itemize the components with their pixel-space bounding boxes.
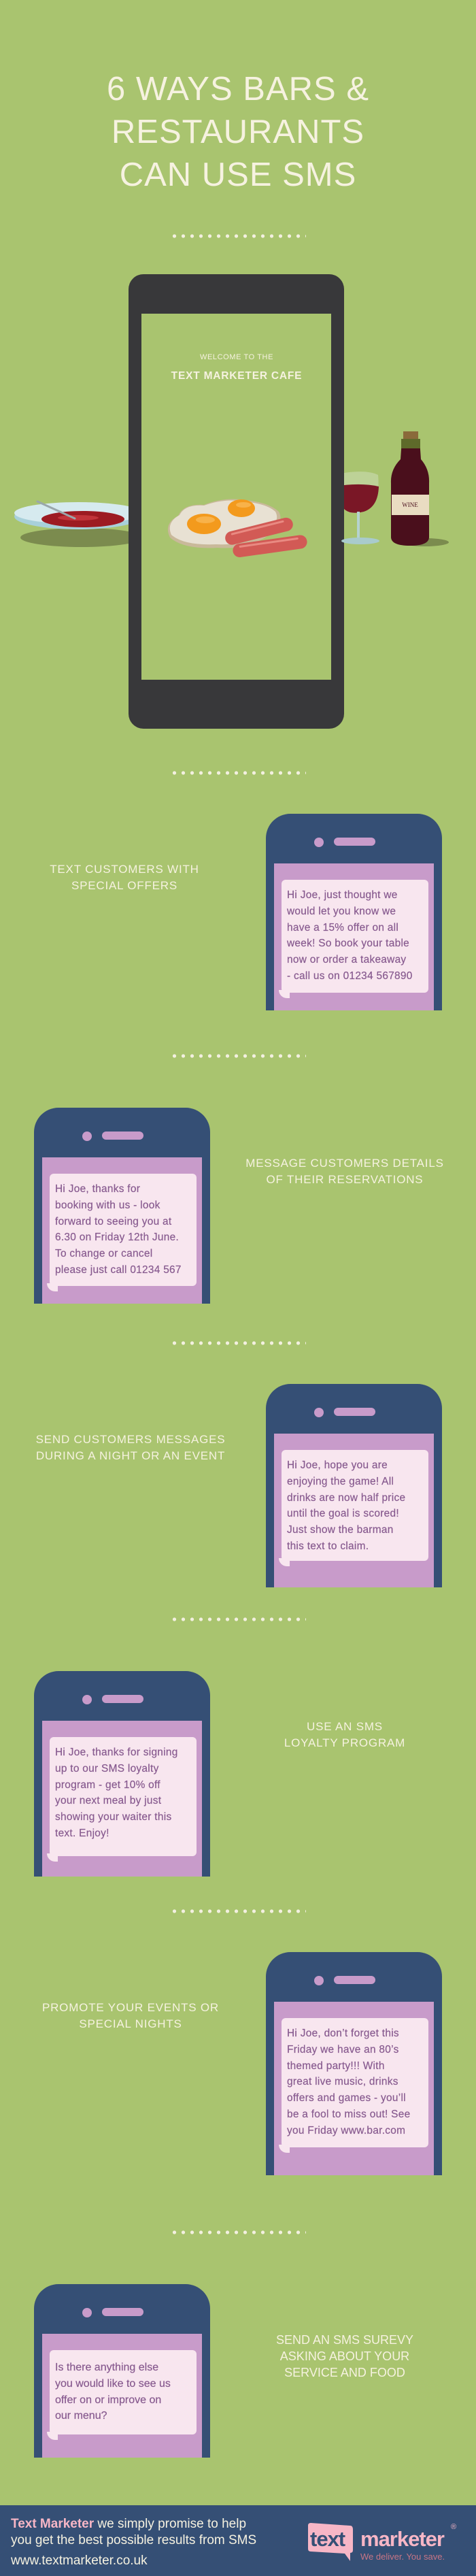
phone 1 [266, 814, 442, 1010]
footer text [11, 2517, 256, 2568]
hero: tablet with food [14, 274, 449, 729]
message bubble 5: Hi Joe, don’t forget this [287, 2028, 399, 2039]
message bubble 1: - call us on 01234 567890 [287, 970, 413, 982]
message bubble 3: this text to claim. [287, 1540, 369, 1552]
message bubble 5: offers and games - you’ll [287, 2092, 406, 2104]
wine bottle [391, 431, 449, 546]
message bubble 2: booking with us - look [55, 1200, 160, 1211]
section 6 heading [276, 2333, 413, 2379]
phone 3 [266, 1384, 442, 1587]
section 4 heading: LOYALTY PROGRAM [284, 1736, 405, 1749]
message bubble 2 [50, 1174, 197, 1286]
logo [308, 2523, 456, 2562]
phone 2 [34, 1108, 210, 1304]
message bubble 6 [50, 2350, 197, 2434]
phone 4 [34, 1671, 210, 1877]
message bubble 4: program - get 10% off [55, 1779, 160, 1791]
message bubble 1: week! So book your table [287, 938, 409, 949]
message bubble 1: now or order a takeaway [287, 954, 406, 965]
message bubble 4: up to our SMS loyalty [55, 1763, 159, 1774]
footer text: Text Marketer we simply promise to help [11, 2517, 246, 2531]
section 2 heading: OF THEIR RESERVATIONS [267, 1173, 423, 1186]
message bubble 1 [282, 880, 428, 993]
tablet: WELCOME TO THE [200, 353, 273, 361]
message bubble 2: forward to seeing you at [55, 1216, 171, 1227]
section 4 heading [284, 1720, 405, 1749]
plate of soup [14, 501, 143, 547]
message bubble 2: Hi Joe, thanks for [55, 1183, 140, 1195]
logo: ® [451, 2523, 456, 2531]
wine bottle: WINE [402, 501, 418, 508]
message bubble 4: text. Enjoy! [55, 1828, 109, 1839]
message bubble 4: Hi Joe, thanks for signing [55, 1747, 178, 1758]
message bubble 3: Just show the barman [287, 1524, 394, 1536]
section 6 heading: SEND AN SMS SUREVY [276, 2333, 413, 2347]
section 5 heading: PROMOTE YOUR EVENTS OR [42, 2001, 219, 2014]
tablet [129, 274, 344, 729]
message bubble 6: Is there anything else [55, 2362, 158, 2373]
message bubble 1: have a 15% offer on all [287, 922, 398, 934]
phone 5 [266, 1952, 442, 2175]
phone 6 [34, 2284, 210, 2458]
section 6 heading: SERVICE AND FOOD [284, 2366, 405, 2379]
message bubble 4: your next meal by just [55, 1795, 161, 1806]
message bubble 1: Hi Joe, just thought we [287, 889, 398, 901]
section 3 heading [36, 1433, 225, 1462]
section 6 heading: ASKING ABOUT YOUR [280, 2349, 409, 2363]
message bubble 5: themed party!!! With [287, 2060, 385, 2072]
section 1 heading [50, 863, 199, 892]
title [107, 71, 369, 193]
wine glass [341, 472, 379, 544]
footer text: www.textmarketer.co.uk [11, 2554, 148, 2568]
message bubble 3 [282, 1450, 428, 1561]
logo: text [310, 2527, 345, 2551]
tablet: TEXT MARKETER CAFE [171, 370, 302, 382]
section 1 heading: TEXT CUSTOMERS WITH [50, 863, 199, 876]
message bubble 2: To change or cancel [55, 1248, 152, 1259]
title: CAN USE SMS [120, 156, 356, 193]
message bubble 5: you Friday www.bar.com [287, 2125, 405, 2136]
title: RESTAURANTS [112, 114, 364, 150]
message bubble 6: our menu? [55, 2410, 107, 2422]
message bubble 3: enjoying the game! All [287, 1476, 394, 1487]
section 5 heading: SPECIAL NIGHTS [79, 2017, 182, 2030]
section 5 heading [42, 2001, 219, 2030]
message bubble 6: you would like to see us [55, 2378, 171, 2390]
section 2 heading: MESSAGE CUSTOMERS DETAILS [245, 1157, 444, 1170]
section 3 heading: DURING A NIGHT OR AN EVENT [36, 1449, 225, 1462]
message bubble 5 [282, 2018, 428, 2147]
section 3 heading: SEND CUSTOMERS MESSAGES [36, 1433, 225, 1446]
message bubble 4: showing your waiter this [55, 1811, 171, 1823]
message bubble 3: until the goal is scored! [287, 1508, 399, 1519]
message bubble 5: great live music, drinks [287, 2076, 398, 2087]
message bubble 4 [50, 1737, 197, 1856]
section 1 heading: SPECIAL OFFERS [71, 879, 177, 892]
message bubble 1: would let you know we [287, 906, 396, 917]
message bubble 2: please just call 01234 567 [55, 1264, 182, 1276]
message bubble 3: drinks are now half price [287, 1492, 405, 1504]
logo: marketer [360, 2527, 444, 2551]
message bubble 5: be a fool to miss out! See [287, 2109, 410, 2120]
message bubble 3: Hi Joe, hope you are [287, 1459, 388, 1471]
logo: We deliver. You save. [360, 2552, 445, 2562]
title: 6 WAYS BARS & [107, 71, 369, 108]
section 4 heading: USE AN SMS [307, 1720, 383, 1733]
message bubble 5: Friday we have an 80’s [287, 2044, 399, 2055]
message bubble 6: offer on or improve on [55, 2394, 161, 2406]
section 2 heading [245, 1157, 444, 1186]
footer text: you get the best possible results from SMS [11, 2533, 256, 2547]
message bubble 2: 6.30 on Friday 12th June. [55, 1232, 179, 1243]
footer [0, 2505, 476, 2576]
eggs and sausages [168, 499, 308, 558]
